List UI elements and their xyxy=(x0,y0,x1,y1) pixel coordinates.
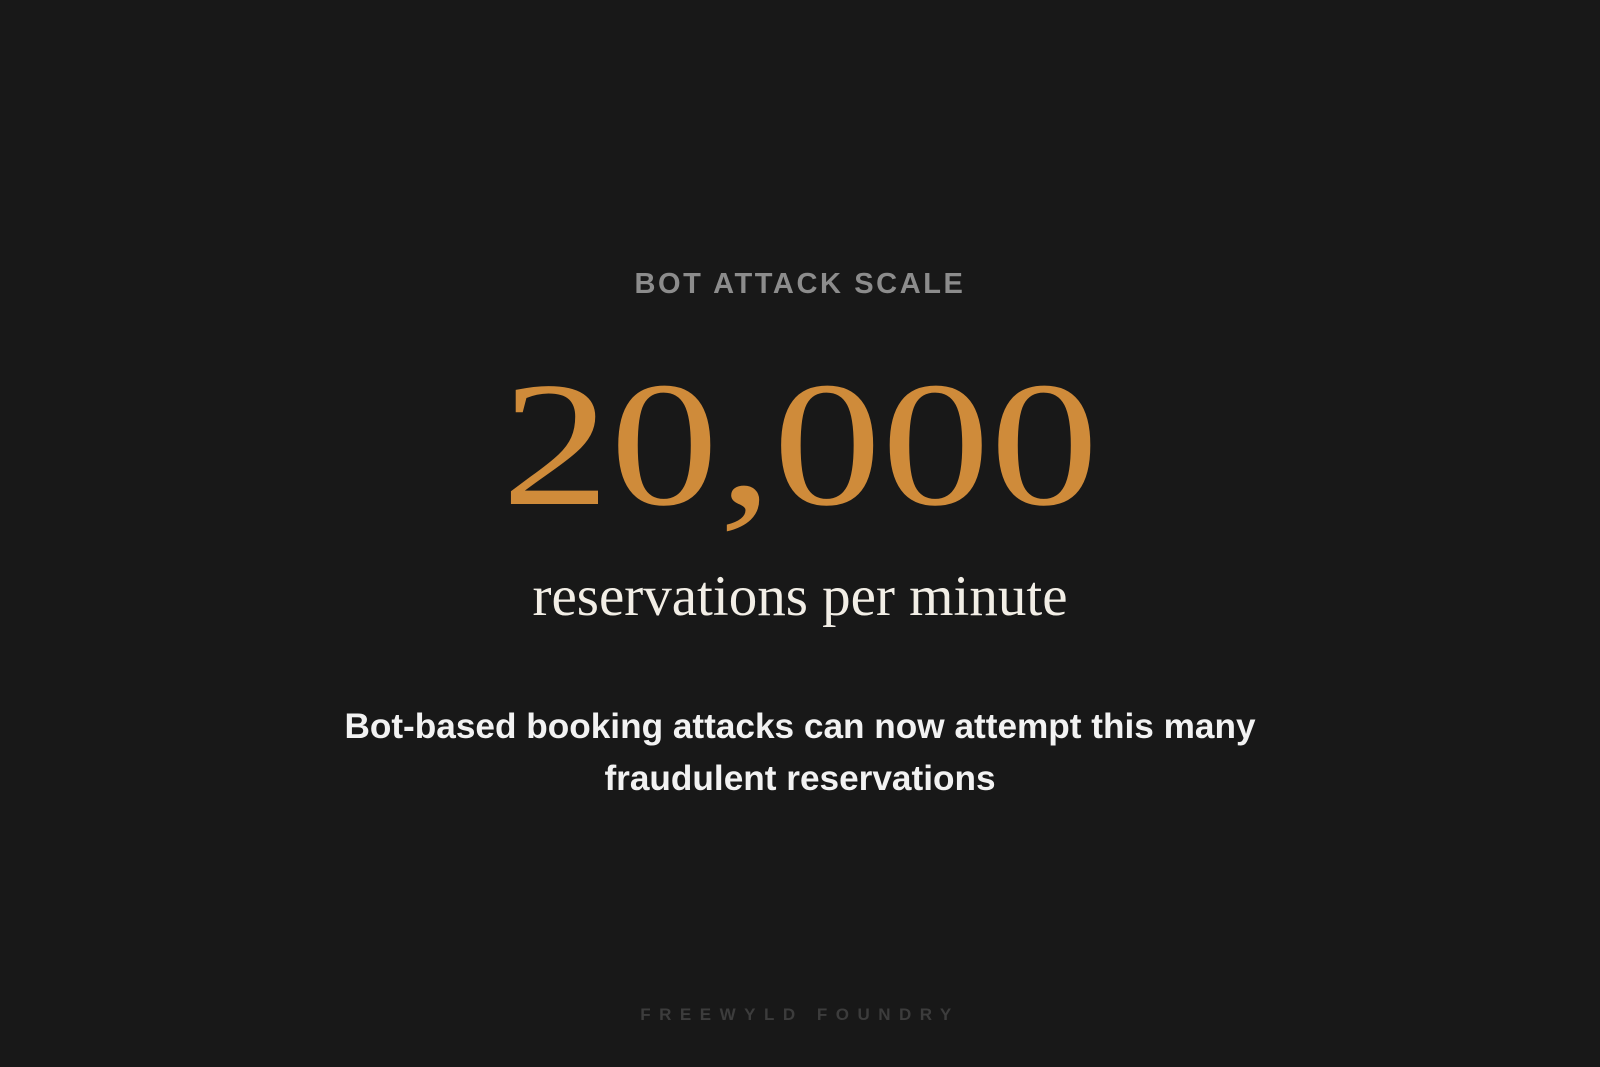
description text xyxy=(344,707,1256,798)
big stat number: 20,000 xyxy=(501,345,1099,543)
stat unit: reservations per minute xyxy=(532,565,1068,628)
description text: fraudulent reservations xyxy=(604,759,996,798)
eyebrow heading: BOT ATTACK SCALE xyxy=(634,268,966,300)
description text: Bot-based booking attacks can now attempt this many xyxy=(344,707,1256,746)
footer brand: FREEWYLD FOUNDRY xyxy=(640,1005,960,1024)
